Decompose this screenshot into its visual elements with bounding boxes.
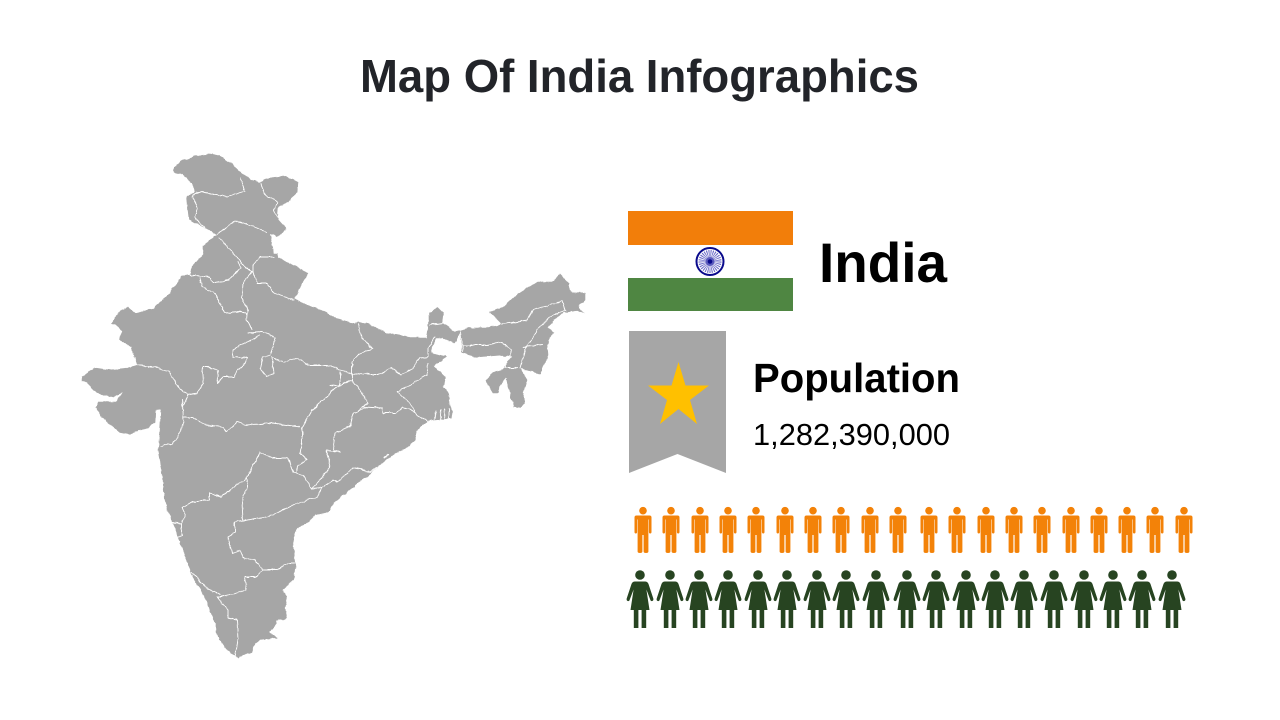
country name: India xyxy=(819,231,948,294)
flag: Ashoka chakra xyxy=(696,248,724,275)
pictogram: women row xyxy=(627,570,1185,628)
flag of India xyxy=(628,211,793,311)
population value: 1,282,390,000 xyxy=(753,417,950,452)
icon: star xyxy=(648,362,709,424)
population heading: Population xyxy=(753,355,960,401)
title: Map Of India Infographics xyxy=(360,50,919,102)
flag: saffron stripe xyxy=(628,211,793,245)
map: landmass xyxy=(82,154,585,657)
map of India xyxy=(82,154,585,657)
map: state borders xyxy=(138,178,565,657)
ribbon with star icon xyxy=(629,331,726,473)
flag: green stripe xyxy=(628,278,793,311)
pictogram: men row xyxy=(634,507,1192,553)
